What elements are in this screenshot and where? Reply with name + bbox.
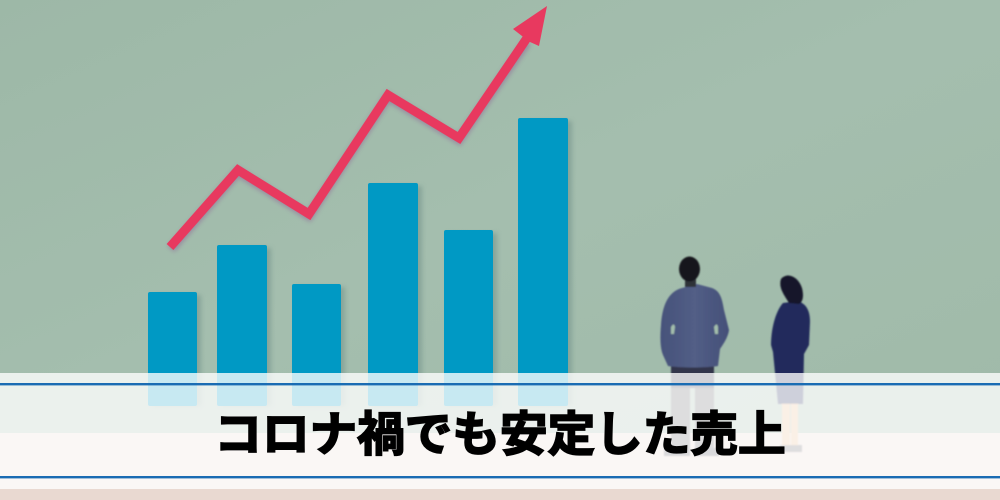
background: table surface: [0, 433, 1000, 500]
band top rule: [0, 383, 1000, 385]
arrow: rising trend line: [170, 6, 547, 249]
title: コロナ禍でも安定した売上: [214, 409, 786, 462]
band bottom rule: [0, 476, 1000, 478]
bar chart: [148, 118, 572, 406]
figure: woman in navy suit: [771, 276, 810, 452]
figure: man in suit: [660, 256, 729, 456]
translucent title band: [0, 373, 1000, 489]
